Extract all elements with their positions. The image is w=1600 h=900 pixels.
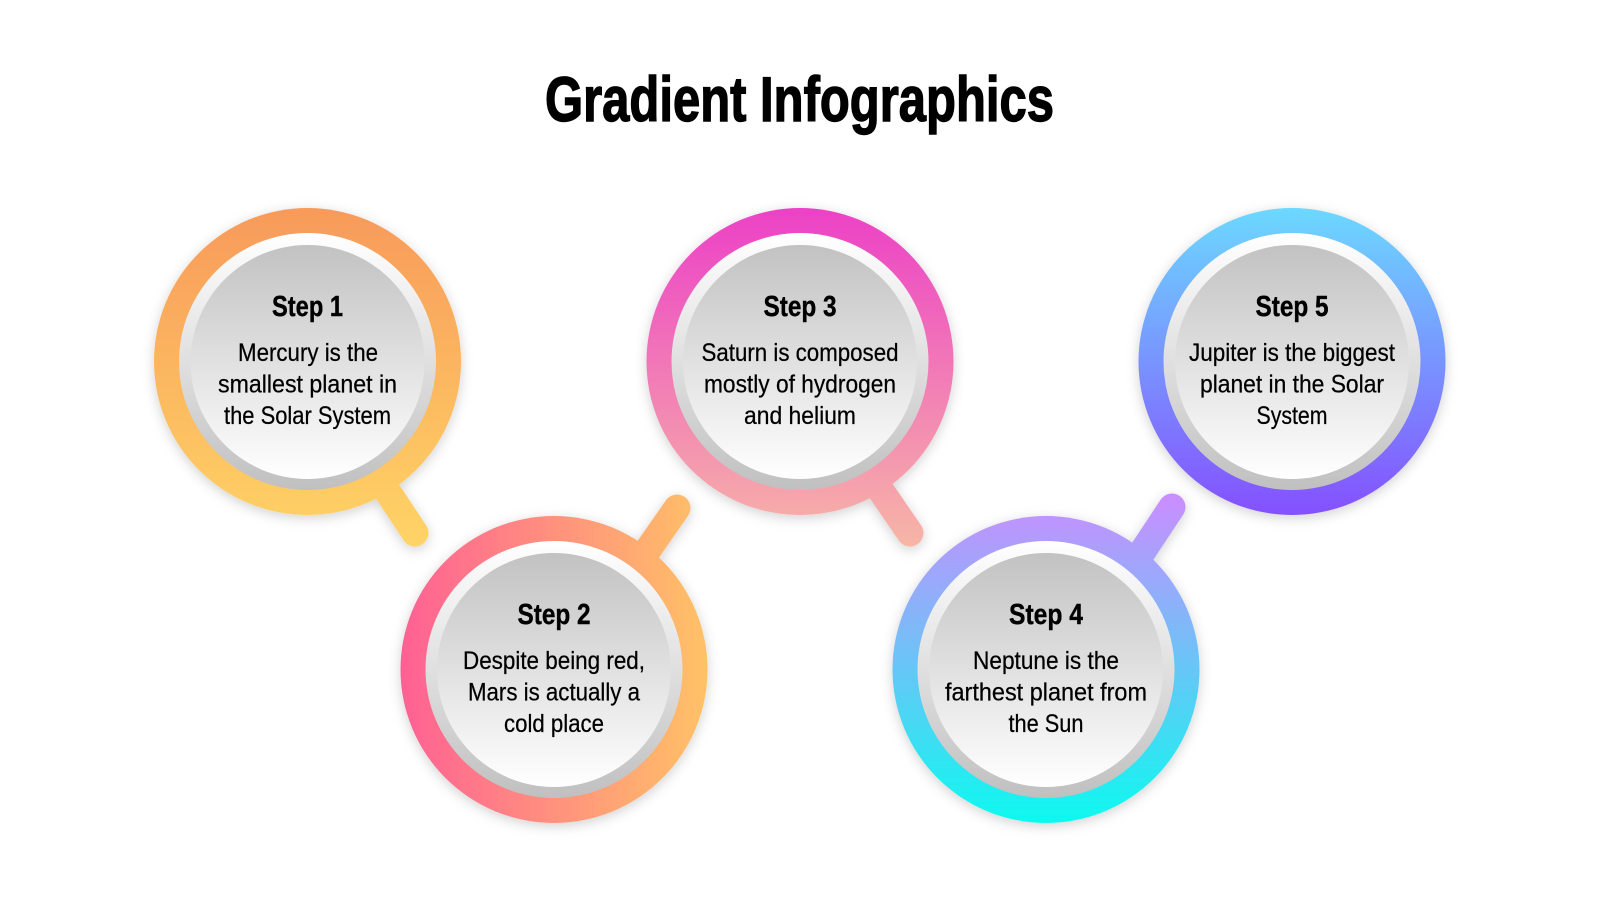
description: step 4: Neptune is the: [973, 647, 1119, 675]
inner face: step 5: [1175, 245, 1409, 479]
heading: step 4: Step 4: [1009, 599, 1083, 631]
inner face: step 1: [190, 245, 424, 479]
description: step 5: Jupiter is the biggest: [1189, 339, 1395, 367]
description: step 2: Mars is actually a: [468, 678, 640, 706]
panel: step 2: [400, 508, 708, 823]
description: step 2: [463, 647, 645, 738]
inner rim: step 3: [672, 233, 928, 490]
ring: step 5: [1138, 208, 1446, 515]
description: step 3: Saturn is composed: [702, 339, 898, 367]
description: step 4: the Sun: [1008, 710, 1084, 738]
inner face: step 4: [929, 553, 1163, 787]
description: step 3: mostly of hydrogen: [704, 370, 896, 398]
ring and connector: step 4: [892, 507, 1200, 823]
description: step 5: planet in the Solar: [1200, 370, 1384, 398]
panel: step 5: [1138, 208, 1446, 515]
description: step 1: smallest planet in: [218, 370, 397, 398]
description: step 3: and helium: [744, 402, 856, 430]
inner face: step 2: [437, 553, 671, 787]
ring and connector: step 1: [154, 208, 461, 533]
description: step 4: [945, 647, 1147, 738]
description: step 1: [218, 339, 397, 430]
ring and connector: step 2: [400, 508, 708, 823]
panel: step 4: [892, 507, 1200, 823]
description: step 5: [1189, 339, 1395, 430]
heading: step 5: Step 5: [1256, 291, 1328, 323]
title: Gradient Infographics: [545, 65, 1054, 135]
description: step 1: Mercury is the: [238, 339, 378, 367]
description: step 2: Despite being red,: [463, 647, 645, 675]
description: step 1: the Solar System: [224, 402, 391, 430]
panel: step 3: [646, 208, 954, 533]
inner rim: step 5: [1164, 233, 1420, 490]
panel: step 1: [154, 208, 461, 533]
inner rim: step 4: [918, 541, 1174, 798]
heading: step 1: Step 1: [272, 291, 343, 323]
inner rim: step 1: [179, 233, 436, 490]
description: step 5: System: [1256, 402, 1328, 430]
heading: step 3: Step 3: [764, 291, 836, 323]
description: step 3: [702, 339, 898, 430]
inner face: step 3: [683, 245, 917, 479]
description: step 4: farthest planet from: [945, 678, 1147, 706]
inner rim: step 2: [426, 541, 682, 798]
description: step 2: cold place: [504, 710, 604, 738]
heading: step 2: Step 2: [518, 599, 590, 631]
ring and connector: step 3: [646, 208, 954, 533]
